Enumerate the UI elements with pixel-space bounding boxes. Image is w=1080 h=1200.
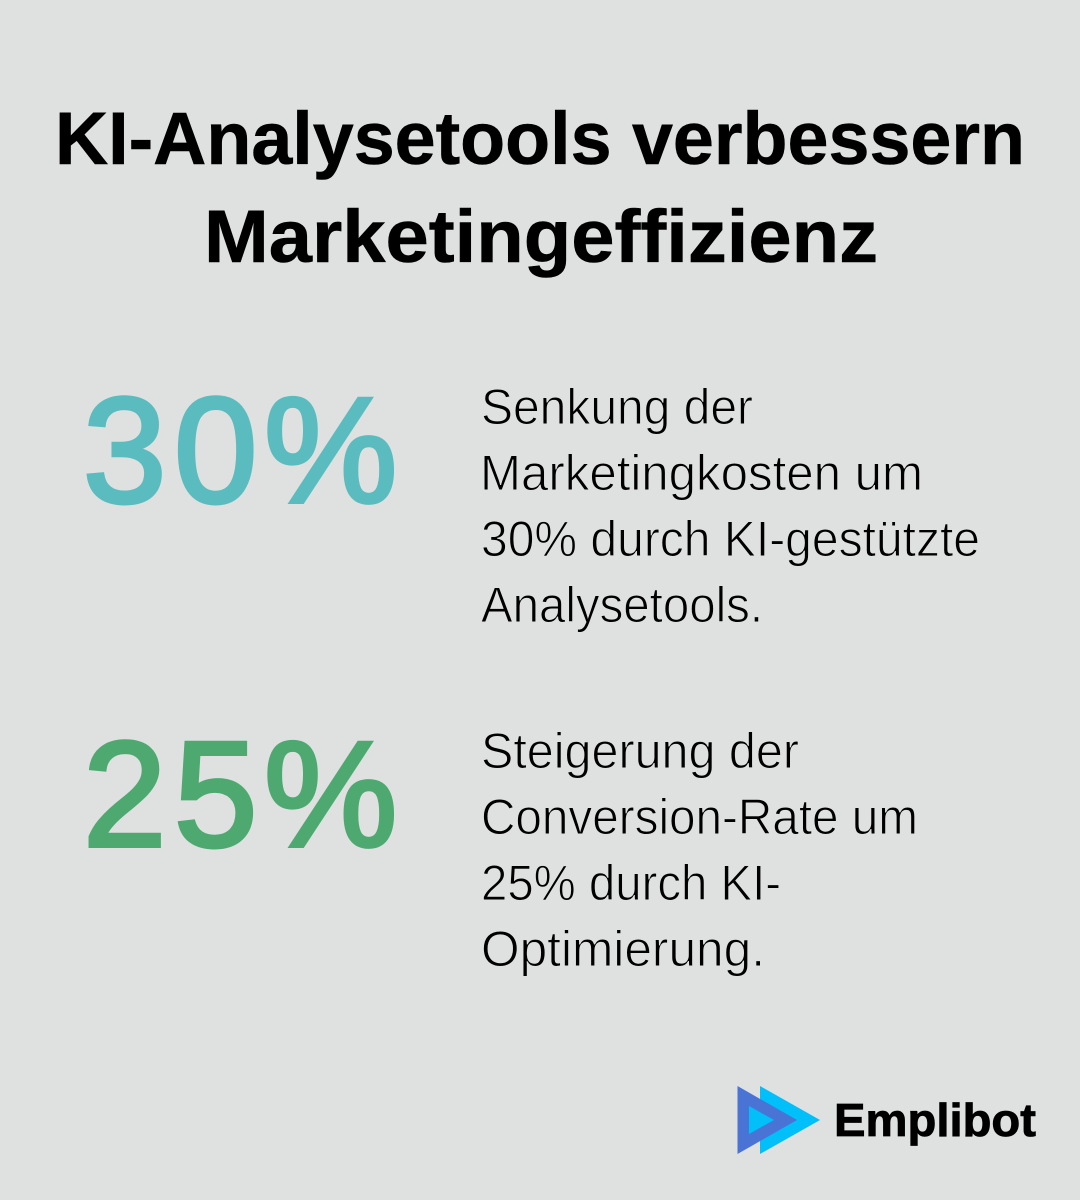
icon: play triangles [738, 1086, 820, 1154]
text block: conversion rate [481, 723, 918, 977]
logo: Emplibot [738, 1086, 1036, 1154]
text block: conversion rate: 25% durch KI- [481, 855, 781, 911]
wordmark: Emplibot [834, 1094, 1036, 1146]
title: KI-Analysetools verbessern [55, 97, 1025, 180]
statistic: 25%: 25% [83, 710, 397, 878]
statistic: 30%: 30% [83, 366, 397, 534]
text block: conversion rate: Conversion-Rate um [481, 789, 918, 845]
text block: cost reduction: Analysetools. [481, 577, 763, 633]
text block: conversion rate: Optimierung. [481, 921, 765, 977]
title: Marketingeffizienz [204, 195, 878, 278]
text block: cost reduction [480, 379, 980, 633]
text block: cost reduction: Marketingkosten um [480, 445, 923, 501]
title [55, 97, 1025, 278]
text block: cost reduction: Senkung der [481, 379, 753, 435]
text block: conversion rate: Steigerung der [481, 723, 799, 779]
text block: cost reduction: 30% durch KI-gestützte [481, 511, 980, 567]
